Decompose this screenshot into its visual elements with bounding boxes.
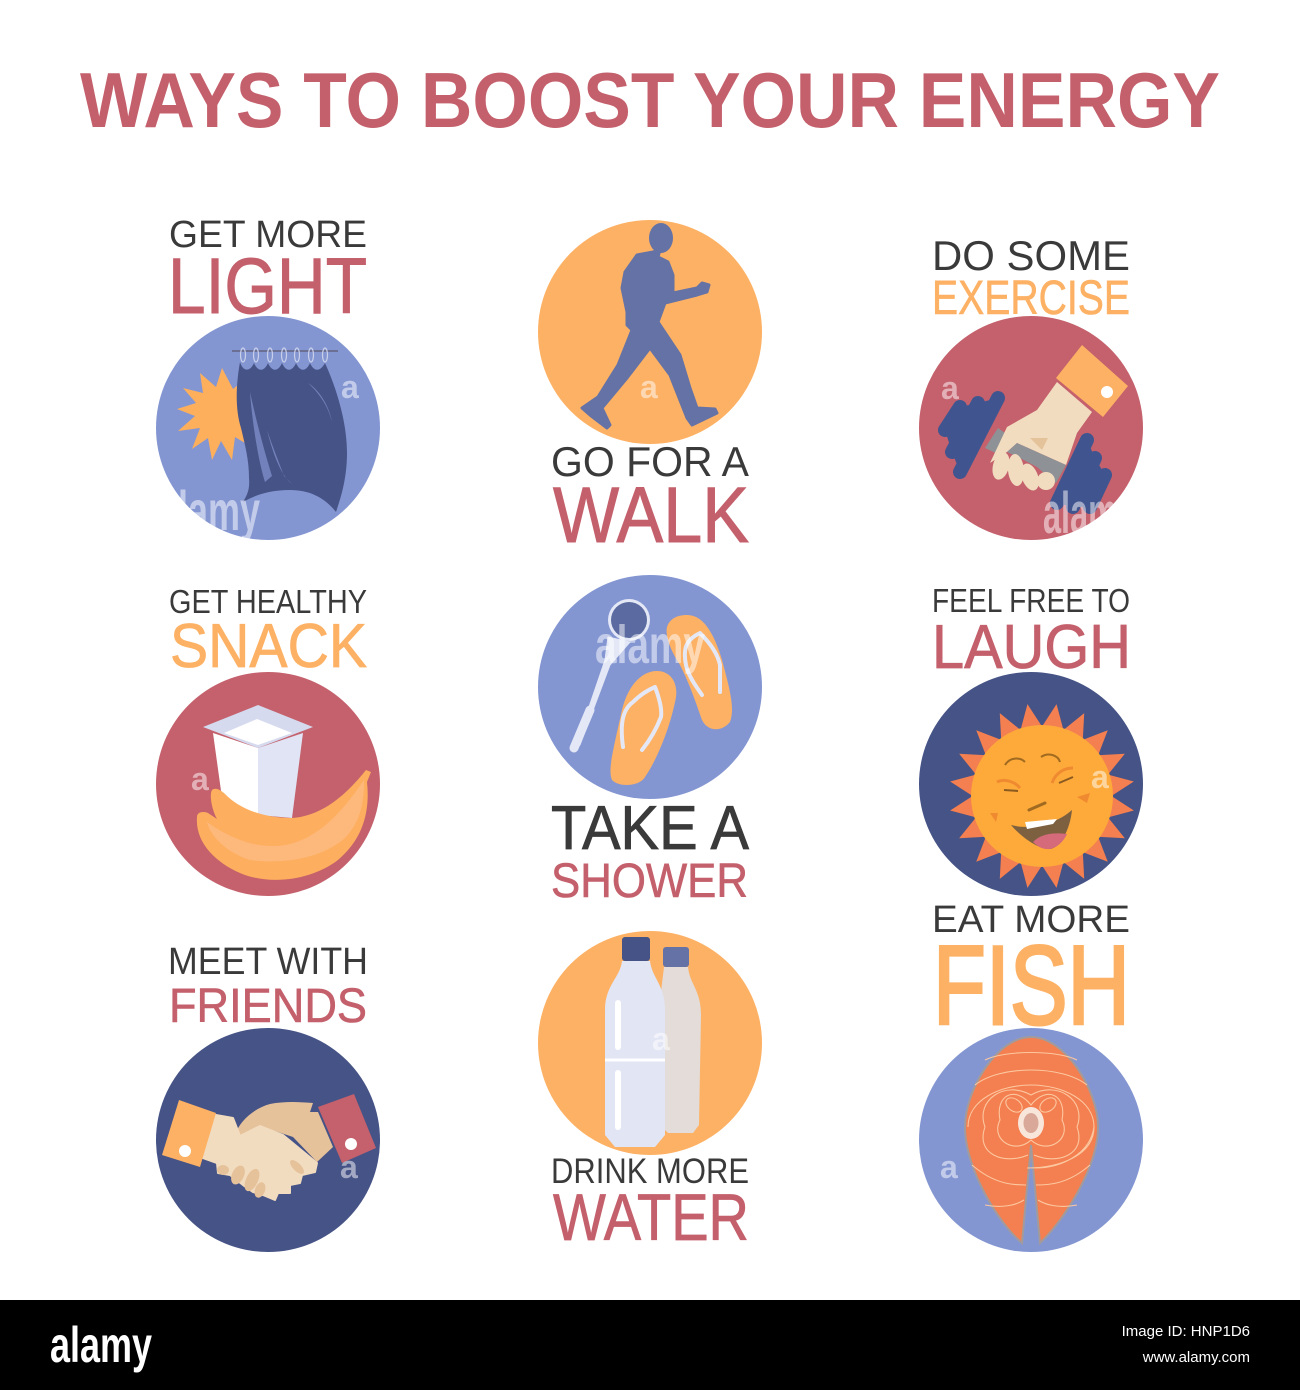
heading: meet with friends: FRIENDS	[169, 980, 367, 1033]
icon: water bottles	[538, 931, 762, 1155]
title: WAYS TO BOOST YOUR ENERGY	[80, 56, 1220, 144]
panel: meet with friends	[156, 941, 380, 1252]
heading: get healthy snack: SNACK	[170, 612, 367, 681]
heading: meet with friends	[168, 941, 368, 1033]
heading: feel free to laugh: LAUGH	[932, 613, 1131, 682]
icon: sun behind curtain: a	[341, 369, 359, 405]
panel: feel free to laugh	[919, 582, 1143, 896]
heading: take a shower: SHOWER	[551, 855, 748, 908]
icon: hand with dumbbell	[919, 316, 1143, 546]
heading: get healthy snack: GET HEALTHY	[169, 583, 367, 620]
icon: salmon steak	[919, 1028, 1143, 1252]
heading: feel free to laugh: FEEL FREE TO	[932, 582, 1130, 619]
heading: get more light: GET MORE	[169, 214, 367, 256]
panel: take a shower	[538, 575, 762, 908]
heading: eat more fish	[932, 899, 1130, 1048]
panel: go for a walk	[538, 220, 762, 559]
panel: do some exercise	[919, 232, 1143, 546]
heading: do some exercise	[932, 232, 1130, 325]
icon: laughing sun	[919, 672, 1143, 896]
icon: water bottles: a	[652, 1021, 670, 1057]
panel: get healthy snack	[156, 583, 380, 896]
footer bar	[0, 1300, 1300, 1390]
icon: walking man: a	[640, 369, 658, 405]
heading: go for a walk: WALK	[553, 470, 749, 559]
heading: take a shower: TAKE A	[551, 794, 750, 863]
heading: go for a walk: GO FOR A	[551, 438, 749, 485]
heading: eat more fish: EAT MORE	[932, 899, 1130, 941]
icon: shower head and flip flops: alamy	[595, 615, 705, 675]
panel: eat more fish	[919, 899, 1143, 1252]
icon: handshake: a	[340, 1149, 358, 1185]
panel: get more light	[156, 214, 380, 542]
heading: do some exercise: DO SOME	[932, 232, 1130, 279]
heading: do some exercise: EXERCISE	[932, 272, 1130, 325]
heading: get more light: LIGHT	[168, 241, 367, 330]
icon: hand with dumbbell: alam	[1043, 481, 1117, 546]
icon: walking man	[538, 220, 762, 444]
heading: drink more water	[551, 1152, 749, 1254]
heading: drink more water: DRINK MORE	[551, 1152, 749, 1191]
heading: feel free to laugh	[932, 582, 1131, 682]
heading: meet with friends: MEET WITH	[168, 941, 368, 983]
icon: handshake	[156, 1028, 380, 1252]
icon: hand with dumbbell: a	[941, 370, 959, 406]
heading: eat more fish: FISH	[933, 923, 1130, 1048]
heading: take a shower	[551, 794, 750, 908]
icon: sun behind curtain	[156, 316, 380, 542]
heading: drink more water: WATER	[553, 1180, 749, 1254]
footer: logo: alamy	[50, 1317, 152, 1373]
icon: yogurt and banana	[156, 672, 380, 896]
icon: sun behind curtain: lamy	[178, 479, 260, 542]
icon: yogurt and banana: a	[191, 761, 209, 797]
panel: drink more water	[538, 931, 762, 1254]
footer: url: www.alamy.com	[1142, 1349, 1250, 1366]
heading: go for a walk	[551, 438, 749, 559]
heading: get more light	[168, 214, 367, 330]
footer: image id: Image ID: HNP1D6	[1122, 1323, 1250, 1340]
icon: shower head and flip flops	[538, 575, 762, 799]
icon: salmon steak: a	[940, 1149, 958, 1185]
icon: laughing sun: a	[1091, 759, 1109, 795]
heading: get healthy snack	[169, 583, 367, 681]
